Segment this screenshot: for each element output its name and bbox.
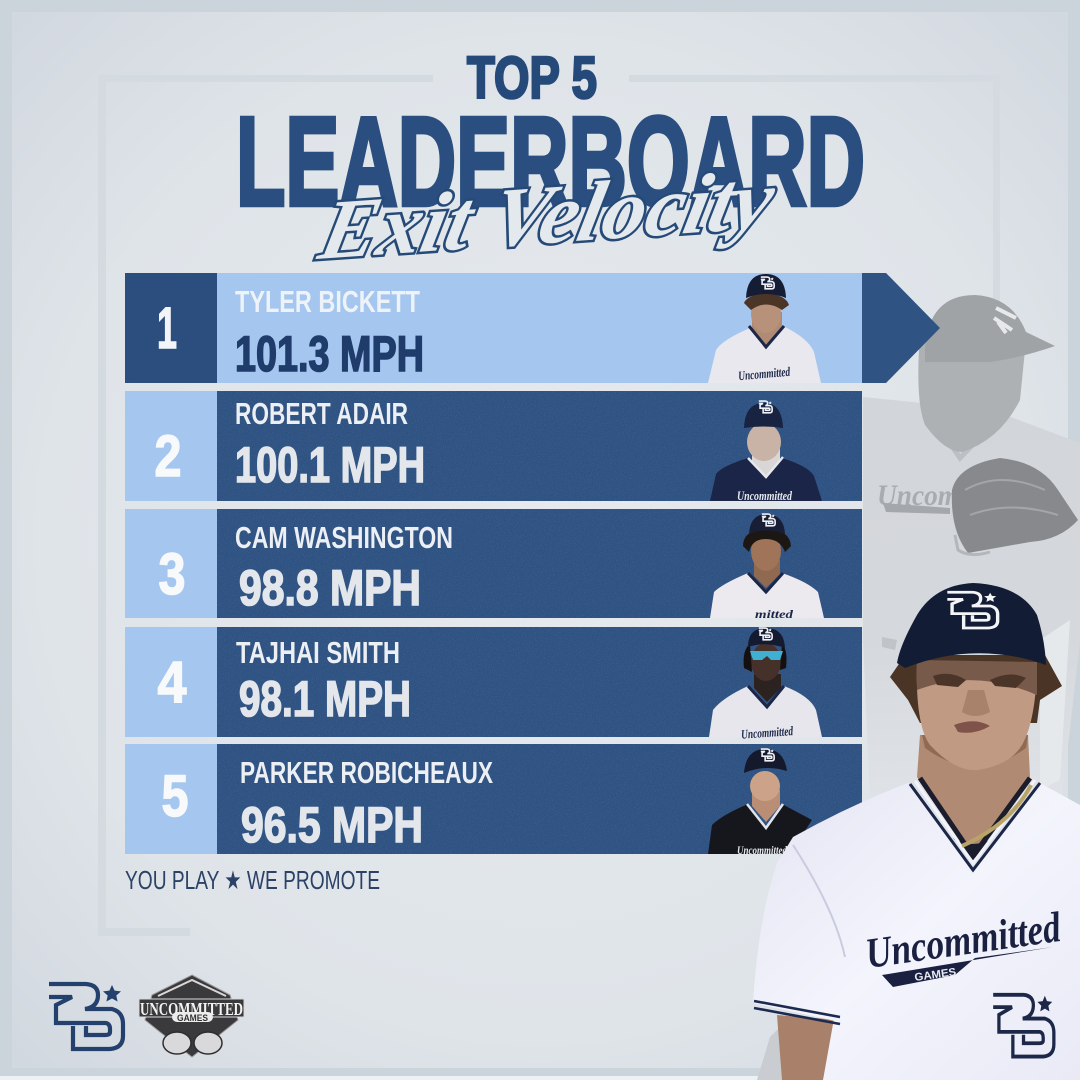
row 2: Robert Adair: 2 — [154, 424, 182, 489]
row 3: Cam Washington: 3 — [158, 542, 186, 607]
necklace — [962, 785, 1031, 846]
row 5: Parker Robicheaux — [125, 744, 862, 857]
cap logo — [947, 592, 998, 628]
player photo 3: mitted — [755, 607, 794, 621]
logo: Uncommitted Games: GAMES — [177, 1013, 208, 1023]
row 4: Tajhai Smith — [125, 627, 862, 742]
sleeve trim — [754, 1001, 840, 1024]
inner collar — [920, 778, 1030, 856]
row 1: Tyler Bickett: 1 — [157, 296, 177, 361]
title: top 5: TOP 5 — [467, 45, 597, 111]
neck shadow — [922, 735, 1028, 766]
slogan: YOU PLAY ★ WE PROMOTE — [125, 865, 380, 895]
player photo 5 — [708, 749, 812, 857]
ghost background player — [757, 295, 1080, 1080]
featured player: GAMES — [914, 966, 957, 984]
player photo 1 — [708, 274, 821, 383]
player photo 5: Uncommitted — [737, 843, 788, 857]
cap — [897, 583, 1046, 668]
row 1: Tyler Bickett: 101.3 MPH — [235, 326, 424, 382]
player photo 4: Uncommitted — [741, 723, 794, 742]
games swoosh — [882, 947, 1053, 987]
jersey logo — [993, 995, 1054, 1057]
hair — [890, 655, 1062, 723]
player photo 3 — [710, 514, 824, 621]
player photo 2 — [710, 401, 822, 503]
row 5: Parker Robicheaux: PARKER ROBICHEAUX — [240, 755, 493, 790]
jersey — [753, 783, 1080, 1080]
row 4: Tajhai Smith: 4 — [158, 650, 186, 715]
row 5: Parker Robicheaux: 5 — [162, 764, 188, 829]
row 4: Tajhai Smith: TAJHAI SMITH — [236, 635, 400, 670]
logo: Uncommitted Games: UNCOMMITTED — [140, 999, 243, 1019]
logo: Uncommitted Games — [139, 975, 244, 1057]
player photo 1: Uncommitted — [738, 364, 791, 383]
collar — [910, 783, 1040, 870]
row 1: Tyler Bickett — [125, 273, 940, 383]
face shadow — [917, 660, 1037, 695]
neck — [917, 735, 1030, 860]
subtitle: exit velocity: Exit Velocity — [311, 152, 784, 278]
logo: 2B star — [49, 984, 123, 1049]
row 1: Tyler Bickett: TYLER BICKETT — [235, 284, 420, 319]
decorative frame — [98, 75, 1000, 936]
face — [917, 660, 1037, 770]
featured player — [753, 583, 1080, 1080]
row 2: Robert Adair: ROBERT ADAIR — [235, 396, 408, 431]
row 3: Cam Washington: CAM WASHINGTON — [235, 520, 453, 555]
player photo 2: Uncommitted — [737, 488, 792, 503]
row 5: Parker Robicheaux: 96.5 MPH — [241, 797, 423, 853]
row 4: Tajhai Smith: 98.1 MPH — [239, 671, 411, 727]
row 3: Cam Washington — [125, 509, 862, 621]
row 2: Robert Adair — [125, 391, 862, 503]
neck opening — [953, 838, 993, 860]
sleeve seam — [793, 845, 845, 957]
player photo 4 — [709, 628, 822, 742]
row 2: Robert Adair: 100.1 MPH — [235, 437, 425, 493]
ghost background player: Uncom — [877, 479, 959, 512]
row 3: Cam Washington: 98.8 MPH — [239, 560, 421, 616]
arm — [777, 1015, 840, 1080]
